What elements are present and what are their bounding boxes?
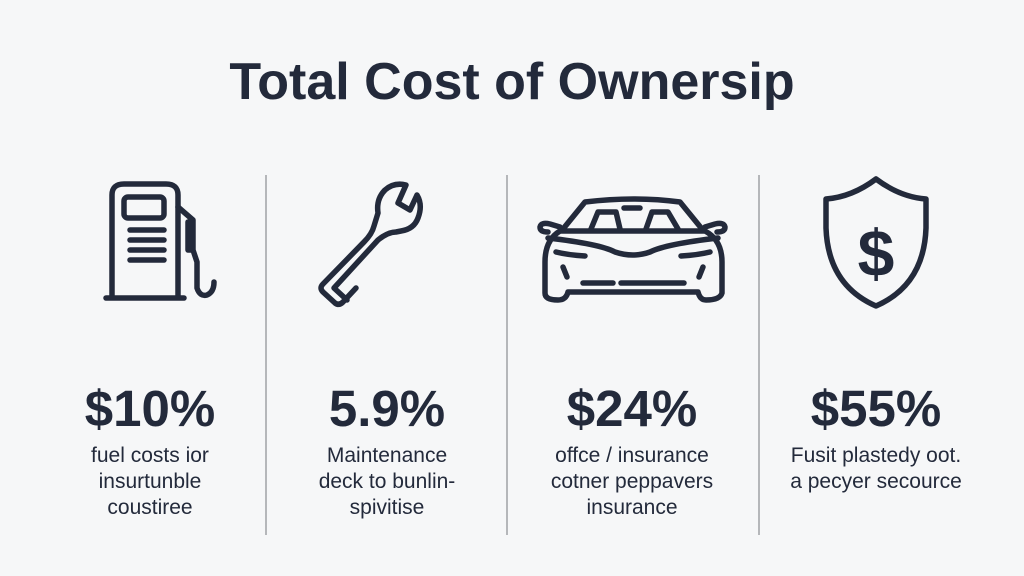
column: security: $55% [811,380,941,437]
column: security [790,380,962,493]
column: security: Fusit plastedy oot. [791,444,961,467]
icon: shield dollar: $ [858,216,894,290]
column: insurance: cotner peppavers [551,470,713,493]
column: maintenance [319,380,455,519]
icon: wrench [321,184,420,304]
column: maintenance: 5.9% [329,380,445,437]
column: insurance: $24% [567,380,697,437]
column: fuel: $10% [85,380,215,437]
column: insurance [551,380,713,519]
column: fuel: fuel costs ior [91,444,209,467]
column: insurance: insurance [586,496,678,519]
column: security: a pecyer secource [790,470,962,493]
column: maintenance: deck to bunlin- [319,470,455,493]
icon: shield dollar [826,179,926,306]
column: fuel [85,380,215,519]
column: fuel: insurtunble [99,470,201,493]
column: maintenance: Maintenance [327,444,447,467]
icon: fuel pump [106,184,214,298]
column: insurance: offce / insurance [555,444,709,467]
title: Total Cost of Ownersip [229,53,795,111]
column: maintenance: spivitise [350,496,424,519]
icon: car [540,199,725,300]
column: fuel: coustiree [107,496,193,519]
